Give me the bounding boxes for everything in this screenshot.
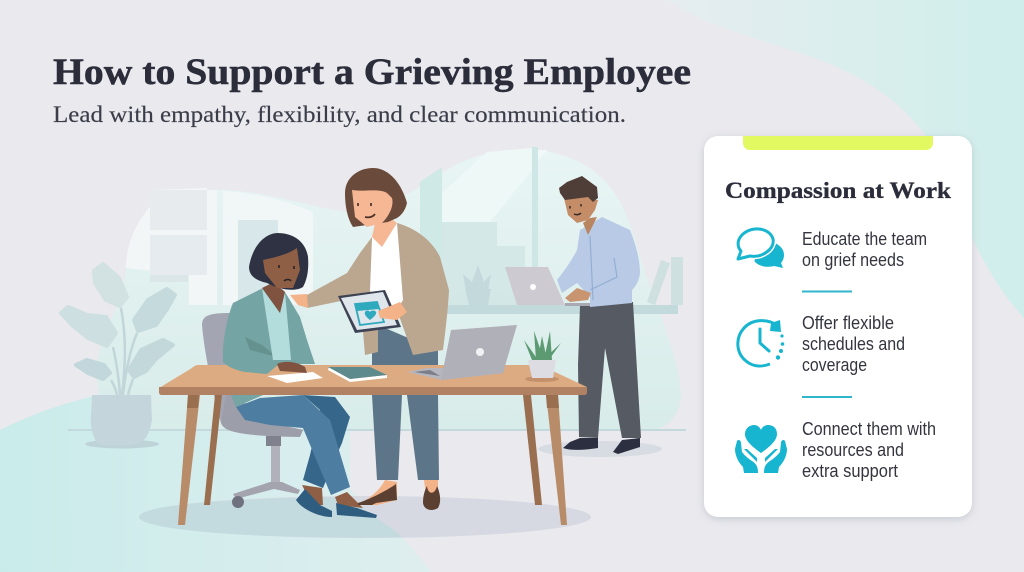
left shoe <box>358 484 397 505</box>
card <box>704 136 972 517</box>
man eyes and smile <box>570 204 581 215</box>
text: educate: Educate the team <box>802 229 927 249</box>
icon: clock <box>738 320 784 366</box>
text: resources: Connect them with <box>802 419 936 439</box>
seated woman legs <box>236 395 377 518</box>
left foot <box>358 480 397 505</box>
standing woman <box>307 168 449 510</box>
right foot <box>424 480 438 495</box>
neck <box>262 283 285 313</box>
seated woman upper body <box>223 233 315 374</box>
back laptop <box>505 267 591 306</box>
text: educate <box>802 229 927 270</box>
back ankle <box>302 485 323 505</box>
title: How to Support a Grieving Employee <box>53 52 691 93</box>
window <box>126 147 548 305</box>
neck <box>372 220 397 247</box>
face <box>263 248 300 288</box>
shelf books <box>647 257 683 305</box>
text: flexible: coverage <box>802 355 867 375</box>
background blob: centre window area <box>97 149 681 430</box>
man hand <box>565 288 591 302</box>
trousers <box>372 325 439 480</box>
man shadow <box>538 441 662 457</box>
floor line <box>68 429 686 431</box>
desk shadow teal part <box>139 497 403 538</box>
eyes and smile <box>358 203 375 217</box>
text: resources <box>802 419 936 481</box>
heart <box>365 310 376 320</box>
man shirt <box>557 217 640 307</box>
shelf board <box>437 305 678 314</box>
shoe left <box>296 489 332 517</box>
cardigan <box>223 288 315 374</box>
shoulder hand <box>290 294 308 308</box>
front ankle <box>335 492 363 508</box>
man head <box>564 195 598 223</box>
cardigan right panel <box>397 223 449 355</box>
man hair <box>559 176 598 202</box>
arm shade <box>245 337 277 357</box>
shelf with plant and books <box>437 257 683 314</box>
background potted plant <box>61 264 175 448</box>
pot shadow <box>85 440 159 448</box>
cardigan left panel <box>307 237 378 355</box>
pot <box>91 395 152 445</box>
hand <box>277 362 307 373</box>
desk shadow <box>139 496 591 538</box>
desk <box>159 365 587 525</box>
inner top <box>262 288 291 360</box>
man neck <box>583 217 597 235</box>
card heading: Compassion at Work <box>725 178 952 204</box>
tablet <box>338 290 401 333</box>
man trousers <box>578 302 641 438</box>
background blob: top right <box>668 0 1024 318</box>
top <box>159 365 587 392</box>
paper on desk <box>267 372 323 383</box>
shelf plant <box>463 265 491 305</box>
face <box>352 190 393 227</box>
office chair <box>202 313 303 508</box>
text: resources: resources and <box>802 440 904 460</box>
white top <box>370 222 404 330</box>
panel: compassion at work <box>704 136 972 517</box>
front laptop <box>407 325 517 380</box>
text: flexible: Offer flexible <box>802 313 894 333</box>
rear legs <box>204 395 542 505</box>
hair <box>249 233 308 290</box>
back leg <box>303 395 350 488</box>
standing woman arm and tablet <box>290 290 407 333</box>
yellow tab <box>743 136 933 150</box>
text: educate: on grief needs <box>802 250 904 270</box>
standing man <box>557 176 641 454</box>
edge <box>159 387 587 395</box>
subtitle: Lead with empathy, flexibility, and clear communication. <box>53 102 626 128</box>
front hand <box>378 302 407 320</box>
hair <box>345 168 407 227</box>
icon: chat bubbles <box>738 229 784 268</box>
shoe right <box>336 503 377 518</box>
leg shade <box>187 395 559 408</box>
man shoes <box>563 438 640 454</box>
desk plant <box>524 331 561 382</box>
book on desk <box>328 367 387 382</box>
cardigan hem below desk <box>231 395 263 407</box>
right shoe <box>423 486 440 510</box>
front legs <box>178 395 567 525</box>
eyes and mouth <box>279 265 294 281</box>
background blob: bottom left <box>0 383 432 572</box>
text: flexible: schedules and <box>802 334 905 354</box>
text: flexible <box>802 313 905 375</box>
calendar icon <box>355 302 384 325</box>
icon: heart in hands <box>735 425 787 473</box>
text: resources: extra support <box>802 461 898 481</box>
front leg <box>236 395 350 495</box>
